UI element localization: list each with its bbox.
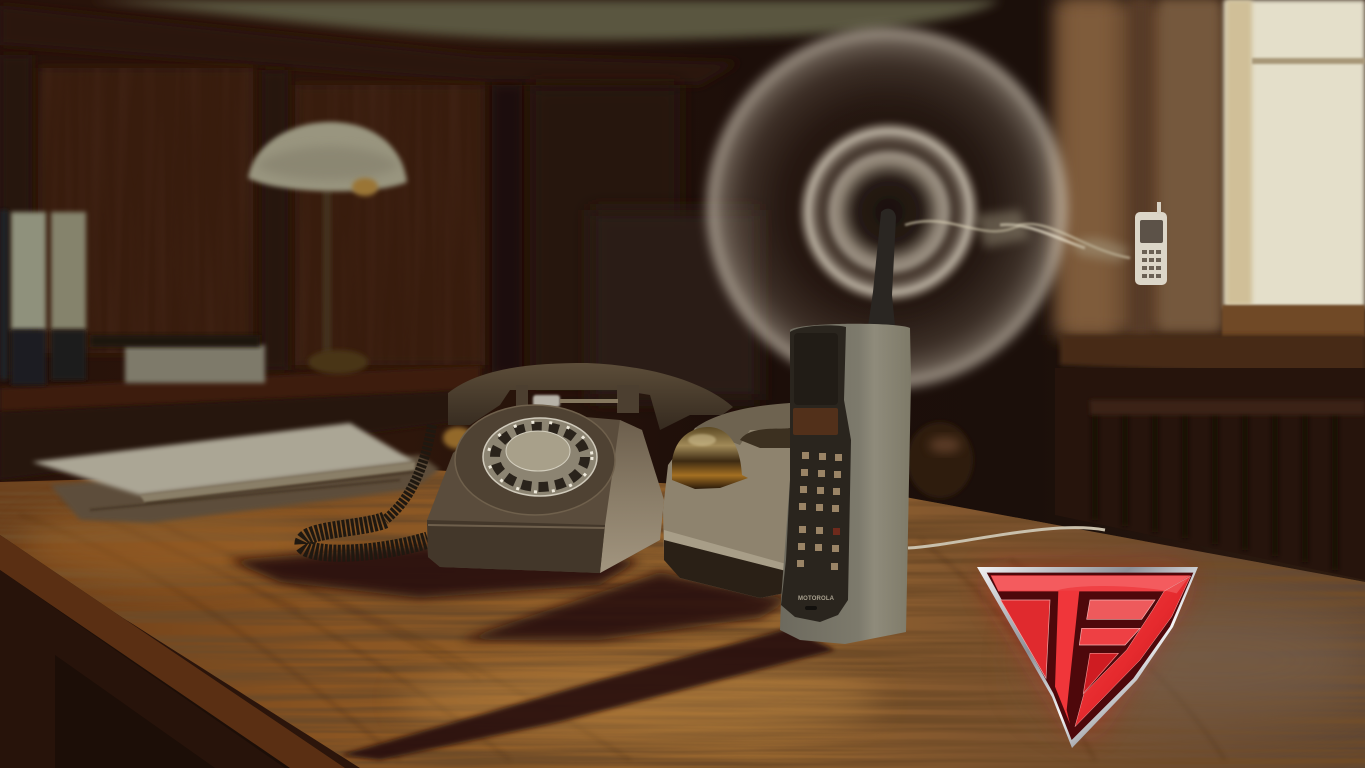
logo shield <box>977 567 1198 748</box>
T stem <box>1055 591 1079 724</box>
right wing <box>1075 576 1191 727</box>
shadows on desk <box>228 545 835 760</box>
mobile phone <box>780 209 911 644</box>
icon: small mobile phone <box>1135 202 1167 285</box>
brass glint behind handset <box>443 427 473 449</box>
F upper bar <box>1087 600 1155 619</box>
dial <box>455 405 615 515</box>
brass bell <box>672 427 748 489</box>
rotary telephone <box>303 363 733 573</box>
top band <box>991 575 1191 591</box>
F middle bar <box>1079 628 1140 645</box>
phone body <box>780 324 911 644</box>
coiled cord <box>303 425 432 553</box>
body <box>427 410 660 573</box>
brand text: MOTOROLA <box>798 596 835 602</box>
wooden knob and cable <box>907 422 1105 548</box>
signal trail <box>905 210 1130 262</box>
F lower triangle <box>1083 653 1118 693</box>
left shelf with binders and lamp <box>0 122 480 480</box>
second telephone with brass detail <box>663 403 790 598</box>
handset <box>448 363 733 430</box>
window and curtain <box>1054 0 1365 580</box>
gloss <box>992 576 1190 593</box>
display <box>794 333 838 405</box>
keypad <box>797 452 842 570</box>
face panel <box>781 325 851 622</box>
signal rings <box>703 24 1071 392</box>
papers stack <box>32 423 440 523</box>
desk <box>0 470 1365 768</box>
shield interior <box>987 573 1193 740</box>
antenna <box>868 209 896 326</box>
left wing <box>1001 600 1050 678</box>
